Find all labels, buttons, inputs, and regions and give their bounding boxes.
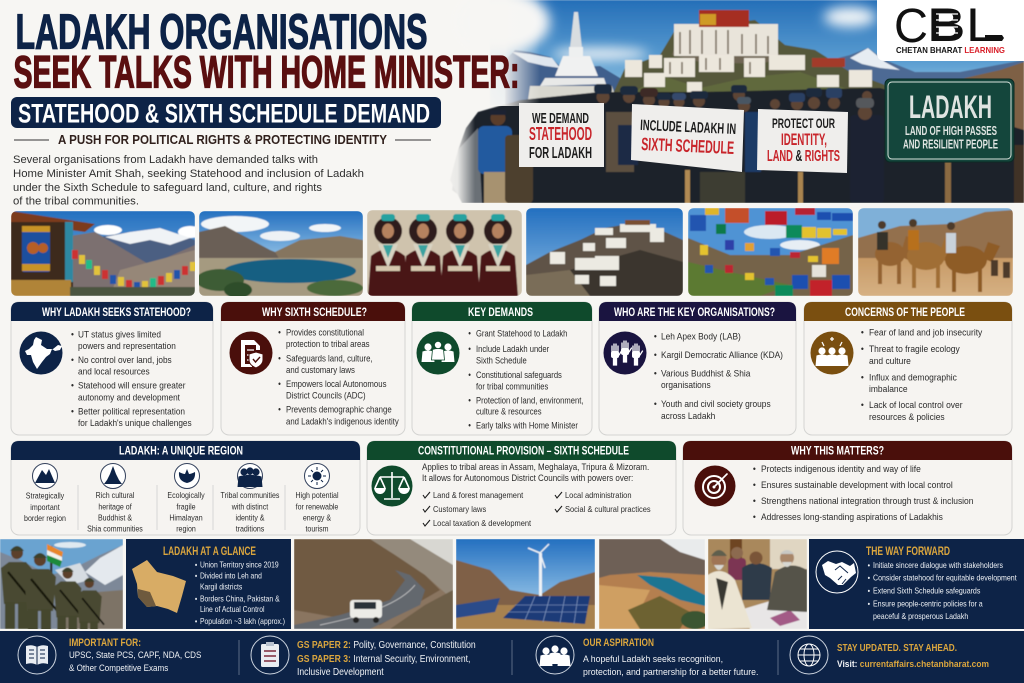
panel: Ladakh, a unique region: identity &	[235, 513, 265, 522]
bullet list: •	[278, 327, 281, 337]
protest sign: identity: LAND & RIGHTS	[767, 148, 840, 165]
logo: Chetan Bharat Learning	[877, 0, 1024, 61]
bullet list: Lack of local control over	[869, 400, 963, 410]
bullet list: •	[861, 327, 864, 338]
photo: mountain road	[294, 539, 453, 629]
icon: document with shield	[230, 332, 272, 374]
footer band	[0, 631, 1024, 683]
description: Applies to tribal areas in Assam, Meghalaya, Tripura & Mizoram.	[422, 462, 649, 472]
photo: hilltop monastery	[526, 208, 683, 296]
bullet list: •	[71, 380, 74, 391]
card: why sixth schedule	[221, 302, 405, 435]
intro paragraph	[13, 154, 364, 208]
panel: Ladakh, a unique region: region	[176, 524, 196, 533]
bullet list: Include Ladakh under	[476, 343, 549, 354]
card: key organisations: WHO ARE THE KEY ORGANISATIONS?	[614, 306, 775, 319]
bullet list: •	[71, 406, 74, 417]
panel: Ladakh, a unique region: tourism	[305, 524, 329, 533]
protest sign: identity: PROTECT OUR	[772, 115, 835, 131]
block: GS papers: GS PAPER 3: Internal Security, Environment,	[297, 654, 470, 664]
facts list: Union Territory since 2019	[200, 560, 279, 570]
bullet list: protection to tribal areas	[286, 338, 370, 349]
facts list	[195, 560, 285, 626]
bullet list: Fear of land and job insecurity	[869, 327, 983, 338]
panel: Ladakh, a unique region: for renewable	[296, 502, 338, 512]
block: important for: IMPORTANT FOR:	[69, 637, 141, 649]
icon: India map	[20, 332, 62, 374]
bullet list: •	[468, 343, 471, 354]
panel: constitutional provision	[367, 441, 676, 535]
icon: mountain	[32, 464, 58, 488]
photo: solar panels and wind turbine	[456, 539, 595, 629]
title: LADAKH ORGANISATIONS	[16, 6, 428, 60]
block: GS papers	[297, 640, 476, 677]
panel: Ladakh, a unique region: traditions	[236, 524, 264, 533]
card header	[221, 302, 405, 321]
bullet list	[71, 329, 192, 428]
checklist: Customary laws	[433, 504, 486, 514]
checklist: Social & cultural practices	[565, 504, 651, 514]
icon: worried community	[810, 332, 854, 374]
panel: constitutional provision: CONSTITUTIONAL PROVISION – SIXTH SCHEDULE	[418, 444, 629, 458]
captions: Strategically	[26, 491, 64, 501]
facts list: •	[195, 571, 198, 581]
panel: Ladakh, a unique region: Himalayan	[169, 513, 203, 522]
protest sign: statehood	[519, 103, 604, 167]
block: our aspiration	[583, 637, 758, 677]
bullet list: powers and representation	[78, 341, 176, 351]
facts list: Population ~3 lakh (approx.)	[200, 616, 285, 626]
panel: Ladakh, a unique region: LADAKH: A UNIQUE REGION	[119, 444, 243, 458]
bullet list: Threat to fragile ecology	[869, 344, 960, 354]
bullet list: Constitutional safeguards	[476, 369, 562, 380]
bullet list: resources & policies	[869, 412, 945, 422]
panel: why this matters	[683, 441, 1012, 535]
bullet list: Safeguards land, culture,	[286, 353, 373, 363]
photo: lake and valley	[599, 539, 709, 629]
bullet list: Empowers local Autonomous	[286, 378, 386, 389]
bullet list: •	[753, 512, 756, 522]
bullet list: Youth and civil society groups	[661, 399, 771, 409]
bullet list: •	[654, 368, 657, 378]
recommendations: Consider statehood for equitable development	[873, 573, 1018, 583]
protest sign: statehood: WE DEMAND	[532, 110, 589, 127]
photo: community meeting	[708, 539, 807, 629]
icon: community	[238, 464, 262, 488]
card: concerns of the people: CONCERNS OF THE PEOPLE	[845, 306, 965, 319]
block: important for: UPSC, State PCS, CAPF, NDA, CDS	[69, 649, 201, 660]
bullet list: Better political representation	[78, 406, 185, 417]
bullet list: Statehood will ensure greater	[78, 380, 186, 391]
checklist: Local administration	[565, 490, 632, 500]
photo: prayer flags	[688, 208, 853, 296]
recommendations: peaceful & prosperous Ladakh	[873, 612, 968, 621]
bullet list: •	[654, 350, 657, 360]
card: why Ladakh seeks statehood	[11, 302, 213, 435]
facts list: •	[195, 594, 198, 603]
title	[14, 6, 520, 98]
panel header	[11, 441, 360, 460]
bullet list: Leh Apex Body (LAB)	[661, 331, 741, 342]
road sign: Ladakh	[885, 79, 1014, 162]
intro paragraph: Home Minister Amit Shah, seeking Statehood and inclusion of Ladakh	[13, 168, 364, 180]
bullet list: •	[861, 372, 864, 382]
panel: Ladakh, a unique region: fragile	[176, 502, 196, 512]
recommendations: •	[868, 586, 870, 596]
intro paragraph: of the tribal communities.	[13, 196, 139, 208]
icon: handshake	[816, 551, 858, 593]
bullet list: Strengthens national integration through trust & inclusion	[761, 496, 973, 506]
bullet list: and customary laws	[286, 364, 355, 375]
block: GS papers: Inclusive Development	[297, 667, 384, 677]
checklist: Land & forest management	[433, 490, 524, 500]
card header	[11, 302, 213, 321]
facts list: Borders China, Pakistan &	[200, 594, 280, 603]
bullet list: Prevents demographic change	[286, 404, 392, 415]
icon: open book	[18, 636, 56, 674]
bullet list	[468, 328, 583, 431]
block: stay updated	[837, 642, 989, 669]
facts list: Kargil districts	[200, 582, 243, 592]
card header	[412, 302, 592, 321]
bullet list: District Councils (ADC)	[286, 390, 366, 401]
block: our aspiration: A hopeful Ladakh seeks recognition,	[583, 654, 723, 664]
protest sign: sixth schedule: SIXTH SCHEDULE	[641, 134, 735, 158]
icon: three people	[416, 332, 460, 374]
panel: Ladakh, a unique region: Tribal communities	[221, 490, 280, 500]
description: It allows for Autonomous District Councils with powers over:	[422, 473, 633, 483]
block: our aspiration: OUR ASPIRATION	[583, 637, 654, 649]
card: key organisations	[599, 302, 796, 435]
icon: leaf	[174, 464, 200, 488]
block: important for: & Other Competitive Exams	[69, 662, 169, 673]
icon: target	[694, 466, 736, 506]
checklist	[423, 490, 651, 528]
block: stay updated: STAY UPDATED. STAY AHEAD.	[837, 642, 957, 654]
bullet list: •	[753, 496, 756, 506]
card: why Ladakh seeks statehood: WHY LADAKH SEEKS STATEHOOD?	[42, 306, 191, 319]
subtitle banner: STATEHOOD & SIXTH SCHEDULE DEMAND	[18, 98, 430, 128]
hero photo: protest in front of monastery	[440, 0, 1024, 203]
panel: Ladakh, a unique region: Buddhist &	[98, 513, 133, 522]
bullet list: •	[861, 400, 864, 410]
block: important for	[69, 637, 201, 673]
bullet list: imbalance	[869, 384, 908, 394]
captions: border region	[24, 513, 66, 523]
bullet list: •	[468, 369, 471, 380]
icon: people	[536, 636, 574, 674]
bullet list: No control over land, jobs	[78, 355, 172, 365]
recommendations: •	[868, 573, 870, 583]
panel: Ladakh, a unique region	[11, 441, 360, 535]
recommendations	[868, 561, 1018, 621]
bullet list: autonomy and development	[78, 392, 180, 402]
icon: raised hands	[604, 332, 646, 374]
recommendations: •	[868, 561, 870, 570]
bullet list: •	[71, 329, 74, 339]
bullet list: •	[753, 480, 756, 490]
bullet list: Kargil Democratic Alliance (KDA)	[661, 350, 783, 360]
bullet list: •	[468, 420, 471, 431]
bullet list: •	[278, 378, 281, 389]
photo: prayer wheel and mountains	[11, 211, 202, 296]
bullet list: •	[654, 399, 657, 409]
title: SEEK TALKS WITH HOME MINISTER:	[14, 47, 520, 98]
photo: mountain lake	[196, 211, 363, 298]
bullet list: •	[861, 344, 864, 354]
bullet list: •	[278, 353, 281, 363]
facts list: Divided into Leh and	[200, 571, 262, 581]
bullet list: Protection of land, environment,	[476, 395, 583, 405]
bullet list: Grant Statehood to Ladakh	[476, 328, 568, 339]
intro paragraph: Several organisations from Ladakh have demanded talks with	[13, 154, 318, 166]
bullet list: Ensures sustainable development with local control	[761, 480, 953, 490]
monastery buildings	[674, 24, 778, 56]
photo: camels in the desert	[858, 208, 1013, 296]
bullet list: •	[753, 464, 756, 474]
bullet list: •	[278, 404, 281, 415]
bullet list: organisations	[661, 380, 711, 390]
protest sign: statehood: FOR LADAKH	[529, 145, 592, 162]
bullet list: •	[468, 328, 471, 339]
bullet list: Various Buddhist & Shia	[661, 368, 750, 378]
icon: sun	[304, 464, 330, 488]
card header	[599, 302, 796, 321]
protest sign: statehood: STATEHOOD	[529, 123, 592, 144]
panel header	[683, 441, 1012, 460]
bullet list	[654, 331, 783, 421]
logo: Chetan Bharat Learning: C	[894, 0, 928, 53]
bullet list: Addresses long-standing aspirations of Ladakhis	[761, 512, 943, 522]
card: key demands	[412, 302, 592, 435]
card header	[804, 302, 1012, 321]
photo: women in traditional dress	[367, 210, 522, 296]
recommendations: Ensure people-centric policies for a	[873, 599, 983, 608]
description	[422, 462, 649, 483]
panel: the way forward	[809, 539, 1024, 629]
panel: Ladakh, a unique region: Rich cultural	[96, 490, 135, 500]
icon: clipboard	[251, 636, 289, 674]
bullet list: •	[71, 355, 74, 365]
bullet list: Early talks with Home Minister	[476, 420, 578, 431]
protest sign: sixth schedule	[631, 104, 744, 172]
bullet list: Influx and demographic	[869, 372, 957, 382]
bullet list: and local resources	[78, 366, 150, 377]
panel: Ladakh, a unique region: Ecologically	[167, 490, 205, 500]
bullet list: for tribal communities	[476, 381, 548, 391]
recommendations: •	[868, 599, 870, 608]
bullet list: across Ladakh	[661, 411, 715, 421]
captions: important	[30, 502, 60, 512]
panel: Ladakh, a unique region: with distinct	[231, 502, 269, 512]
bullet list: for Ladakh's unique challenges	[78, 418, 192, 428]
icon: scales of justice	[372, 466, 412, 506]
panel: the way forward: THE WAY FORWARD	[866, 546, 950, 558]
bullet list: and culture	[869, 356, 911, 366]
captions	[24, 491, 66, 523]
protest sign: sixth schedule: INCLUDE LADAKH IN	[640, 117, 736, 138]
map of Ladakh	[132, 560, 186, 613]
bullet list	[278, 327, 399, 427]
block: our aspiration: protection, and partnership for a better future.	[583, 667, 758, 677]
bullet list: Provides constitutional	[286, 327, 364, 337]
facts list: •	[195, 560, 198, 570]
panel: Ladakh, a unique region: High potential	[295, 490, 339, 500]
tagline: A PUSH FOR POLITICAL RIGHTS & PROTECTING IDENTITY	[58, 132, 387, 147]
stupa	[570, 12, 582, 48]
crowd	[452, 88, 1024, 203]
bullet list	[753, 464, 973, 522]
bullet list: •	[654, 331, 657, 342]
panel: Ladakh at a glance	[126, 539, 291, 629]
block: GS papers: GS PAPER 2: Polity, Governance, Constitution	[297, 640, 476, 650]
bullet list: Sixth Schedule	[476, 355, 527, 366]
panel: Ladakh, a unique region: energy &	[303, 513, 332, 522]
checklist: Local taxation & development	[433, 518, 532, 528]
bullet list: UT status gives limited	[78, 329, 161, 339]
bullet list: Protects indigenous identity and way of life	[761, 464, 921, 474]
bullet list: culture & resources	[476, 406, 542, 417]
bullet list: •	[468, 395, 471, 405]
protest sign: identity: IDENTITY,	[781, 131, 827, 149]
panel: Ladakh at a glance: LADAKH AT A GLANCE	[163, 546, 256, 558]
protest sign: identity	[757, 109, 848, 173]
block: stay updated: Visit: currentaffairs.chetanbharat.com	[837, 658, 989, 669]
panel: Ladakh, a unique region: heritage of	[98, 502, 132, 512]
photo: soldiers with flag	[0, 539, 123, 629]
bullet list: and Ladakh's indigenous identity	[286, 416, 399, 427]
icon: globe	[790, 636, 828, 674]
intro paragraph: under the Sixth Schedule to safeguard land, culture, and rights	[13, 182, 322, 194]
recommendations: Initiate sincere dialogue with stakeholders	[873, 561, 1003, 570]
panel: why this matters: WHY THIS MATTERS?	[791, 444, 884, 458]
panel: Ladakh, a unique region: Shia communities	[87, 524, 143, 533]
card: concerns of the people	[804, 302, 1012, 435]
bullet list	[861, 327, 983, 422]
facts list: •	[195, 616, 198, 626]
recommendations: Extend Sixth Schedule safeguards	[873, 586, 981, 596]
logo: Chetan Bharat Learning: CHETAN BHARAT LEARNING	[896, 45, 1005, 55]
card: key demands: KEY DEMANDS	[468, 306, 533, 319]
card: why sixth schedule: WHY SIXTH SCHEDULE?	[262, 306, 367, 319]
panel header	[367, 441, 676, 460]
facts list: Line of Actual Control	[200, 604, 265, 614]
icon: stupa	[100, 464, 126, 488]
